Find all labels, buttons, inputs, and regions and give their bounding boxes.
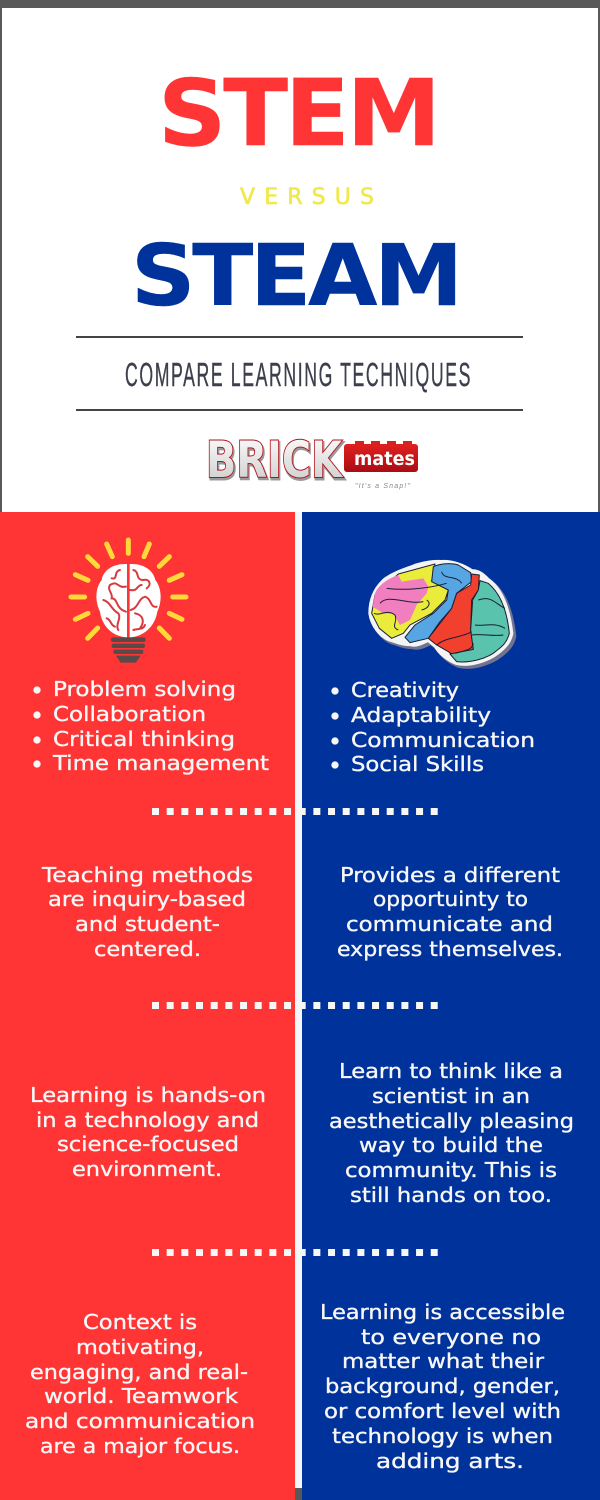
text: STEAM accessibility: adding arts. bbox=[376, 1449, 524, 1473]
text: STEAM accessibility: background, gender, bbox=[325, 1374, 560, 1398]
centre divider bbox=[295, 512, 302, 1488]
text: STEM hands-on learning: in a technology and bbox=[36, 1108, 259, 1132]
icon: light bulb with brain bbox=[71, 540, 186, 663]
text: STEM context: world. Teamwork bbox=[44, 1384, 238, 1408]
text: STEM context: are a major focus. bbox=[40, 1434, 240, 1458]
text: STEAM think like a scientist: scientist in an bbox=[372, 1084, 530, 1108]
text: STEAM expression bbox=[337, 863, 563, 961]
text: STEAM accessibility: or comfort level with bbox=[324, 1399, 561, 1423]
text: STEAM expression: opportuinty to bbox=[373, 887, 528, 911]
text: STEAM expression: communicate and bbox=[346, 912, 553, 936]
text: STEM teaching methods: and student- bbox=[75, 912, 220, 936]
text: STEM hands-on learning: science-focused bbox=[57, 1132, 239, 1156]
text: STEM context: Context is bbox=[83, 1310, 197, 1334]
text: STEM hands-on learning bbox=[30, 1083, 266, 1181]
dotted divider 1 bbox=[152, 808, 440, 815]
text: STEM teaching methods: centered. bbox=[94, 937, 201, 961]
text: STEAM think like a scientist: community. This is bbox=[345, 1158, 557, 1182]
text: STEAM expression: Provides a different bbox=[340, 863, 560, 887]
text: STEAM think like a scientist: aesthetically pleasing bbox=[329, 1109, 574, 1133]
text: STEM hands-on learning: Learning is hands-on bbox=[30, 1083, 266, 1107]
list: STEAM skills: Communication bbox=[351, 728, 535, 752]
text: STEM context: engaging, and real- bbox=[30, 1360, 248, 1384]
list: STEAM skills: Creativity bbox=[351, 678, 459, 702]
text: STEM hands-on learning: environment. bbox=[72, 1157, 222, 1181]
text: STEAM think like a scientist: still hands on too. bbox=[350, 1183, 552, 1207]
dotted divider 2 bbox=[152, 1002, 440, 1009]
panel: STEM column bbox=[0, 512, 295, 1500]
text: STEAM think like a scientist bbox=[329, 1059, 574, 1207]
icon: colourful brain bbox=[372, 563, 513, 665]
list: STEAM skills bbox=[332, 678, 535, 776]
list: STEM skills: Time management bbox=[52, 751, 269, 775]
list: STEM skills: Collaboration bbox=[53, 702, 206, 726]
logo: Brick mates: BRICK bbox=[206, 431, 344, 489]
text: STEAM accessibility: Learning is accessible bbox=[320, 1300, 565, 1324]
list: STEAM skills: Social Skills bbox=[351, 752, 484, 776]
header panel bbox=[2, 8, 598, 512]
text: STEAM think like a scientist: way to build the bbox=[359, 1133, 543, 1157]
text: STEAM accessibility bbox=[320, 1300, 565, 1473]
text: STEM context: and communication bbox=[25, 1409, 255, 1433]
text: STEM teaching methods: Teaching methods bbox=[41, 863, 253, 887]
text: STEAM accessibility: matter what their bbox=[342, 1349, 545, 1373]
dotted divider 3 bbox=[152, 1249, 440, 1256]
text: STEM context: motivating, bbox=[76, 1335, 204, 1359]
text: STEAM accessibility: technology is when bbox=[332, 1424, 553, 1448]
title: STEM: STEM bbox=[158, 60, 438, 167]
list: STEM skills bbox=[34, 677, 269, 775]
list: STEM skills: Problem solving bbox=[53, 677, 236, 701]
text: STEM context bbox=[25, 1310, 255, 1458]
title: STEAM: STEAM bbox=[131, 227, 460, 326]
logo: Brick mates: mates bbox=[354, 448, 415, 470]
text: STEAM accessibility: to everyone no bbox=[361, 1325, 541, 1349]
list: STEAM skills: Adaptability bbox=[351, 703, 491, 727]
list: STEM skills: Critical thinking bbox=[53, 727, 235, 751]
logo: Brick mates: BRICK bbox=[207, 433, 345, 491]
text: STEAM think like a scientist: Learn to think like a bbox=[339, 1059, 563, 1083]
text: STEM teaching methods: are inquiry-based bbox=[48, 887, 246, 911]
text: STEM teaching methods bbox=[41, 863, 253, 961]
text: STEAM expression: express themselves. bbox=[337, 937, 563, 961]
panel: STEAM column bbox=[302, 512, 600, 1500]
subtitle: versus: VERSUS bbox=[240, 185, 374, 210]
logo: Brick mates: "It's a Snap!" bbox=[355, 483, 410, 490]
